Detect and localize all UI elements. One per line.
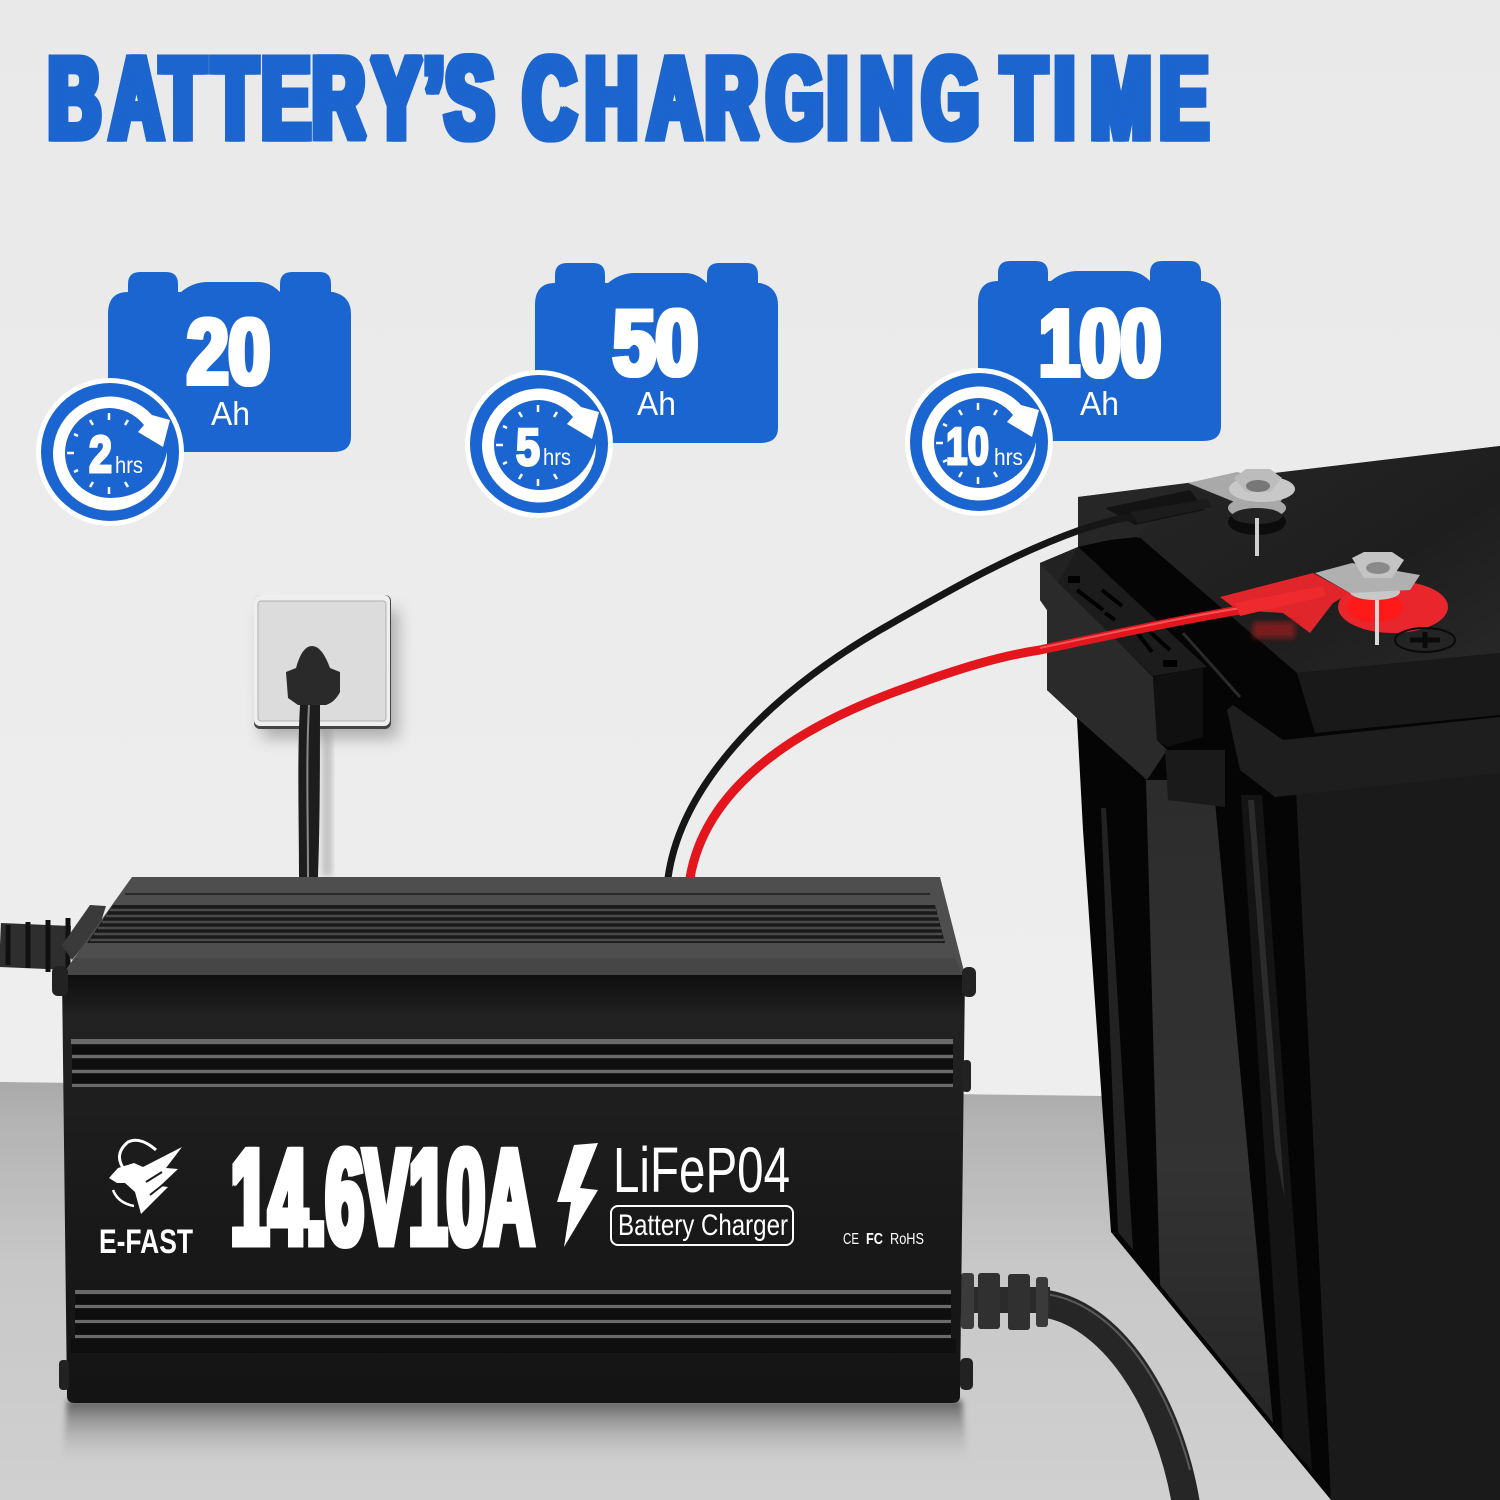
icon: clock 2 hrs: 2 [89,426,112,484]
charger top face [62,877,965,975]
charger shadow [62,1400,968,1465]
input cable, left [0,905,106,975]
bracket foot [1165,750,1225,807]
black terminal [1188,469,1295,556]
icon: 50Ah battery: Ah [637,385,676,422]
battery charger badge: Battery Charger [618,1209,788,1242]
battery left face panels [1101,780,1312,1470]
handle bracket [1040,547,1225,807]
charger body [52,877,976,1403]
charger front face [62,975,965,1403]
red terminal [1220,552,1455,652]
brand name: E-FAST [99,1223,193,1261]
icon: 100Ah battery [978,261,1221,441]
charger label [99,1121,924,1273]
icon: clock 2 hrs [36,378,184,526]
battery lid top surface [1137,446,1500,673]
shelf band [1227,705,1500,797]
icon: 20Ah battery: 20 [187,299,270,404]
battery [1040,446,1500,1500]
top face fins [66,893,963,977]
icon: clock 5 hrs: hrs [543,444,571,470]
certification marks: RoHS [890,1231,924,1248]
red wire [690,586,1326,878]
icon: 100Ah battery: Ah [1080,385,1119,422]
battery silhouette [1040,446,1500,1500]
lid front side [1297,653,1500,733]
certification marks: FC [866,1231,883,1248]
wire channel on lid [1105,490,1205,525]
front rails, upper [71,1039,953,1087]
logo [109,1140,182,1214]
front rails, lower [70,1290,956,1353]
icon: clock 10 hrs [905,368,1053,516]
slots [1077,590,1170,652]
bracket leg [1153,667,1203,747]
battery right face [1296,770,1500,1500]
black wire [668,499,1212,878]
icon group: 50Ah battery, 5 hrs [465,263,778,518]
title: BATTERY’S CHARGING TIME [48,35,1208,163]
output cable [961,1273,1190,1500]
icon: clock 5 hrs [465,370,613,518]
raised rear corner of lid [1078,482,1195,547]
icon: clock 5 hrs: 5 [516,419,540,477]
screws [52,966,976,1390]
battery charger badge [611,1206,793,1245]
certification marks [843,1231,924,1248]
icon group: 100Ah battery, 10 hrs [905,261,1221,516]
icon: 20Ah battery: Ah [211,395,250,432]
icon: 50Ah battery [535,263,778,443]
icon: clock 10 hrs: 10 [946,418,989,476]
wall socket with plug and cord [254,595,398,877]
certification marks: CE [843,1231,859,1248]
slot strip [1058,547,1207,676]
icon: clock 2 hrs: hrs [115,452,143,478]
chemistry label: LiFeP04 [613,1134,790,1206]
voltage and current: 14.6V10A [231,1121,534,1273]
icon group: 20Ah battery, 2 hrs [36,272,351,526]
top rear of bracket [1040,547,1100,583]
icon: clock 10 hrs: hrs [994,444,1023,470]
lid groove [1078,537,1302,742]
icon: 100Ah battery: 100 [1039,290,1161,397]
icon: 50Ah battery: 50 [613,290,698,395]
bracket side face [1040,563,1167,780]
icon: lightning bolt [557,1143,598,1247]
table surface [0,1082,1500,1500]
icon: 20Ah battery [108,272,351,452]
